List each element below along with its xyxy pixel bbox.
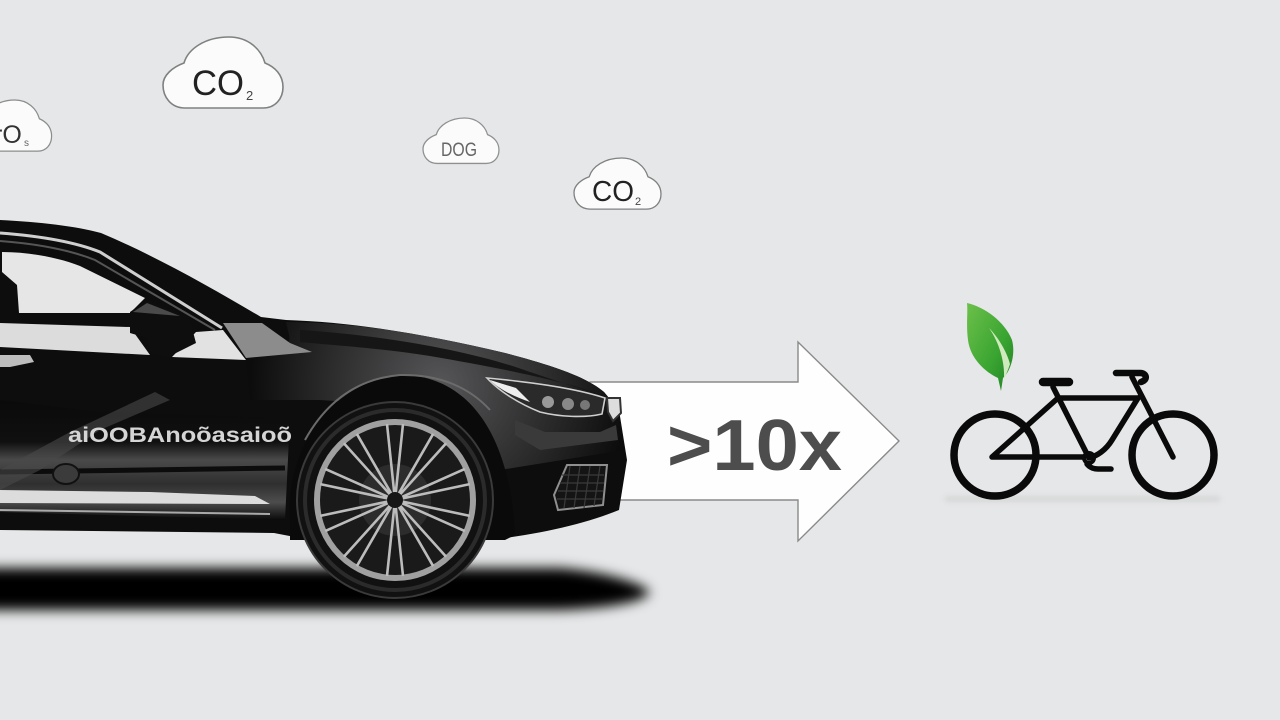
icon: bicycle [954, 373, 1214, 496]
hood dark crease [300, 330, 604, 396]
rear wheel [954, 414, 1036, 496]
rim [317, 422, 473, 578]
cloud: large CO2 [163, 37, 283, 108]
cloud: partially cropped CO2, left edge: s [24, 138, 29, 149]
cloud: large CO2: 2 [246, 88, 253, 103]
A-pillar chrome line [0, 233, 222, 328]
bumper crease [515, 420, 618, 450]
cloud: medium CO2: 2 [635, 196, 641, 208]
grille emblem [607, 398, 621, 421]
car ground shadow [0, 568, 650, 610]
lower window reflection [0, 323, 150, 355]
fog lamp grille [554, 465, 607, 510]
car: black sedan front [0, 220, 627, 598]
front wheel [1132, 414, 1214, 496]
icon: green leaf [967, 303, 1013, 391]
crank and pedal [1084, 453, 1094, 463]
handlebar [1116, 373, 1146, 382]
windshield base highlight [172, 330, 246, 360]
cloud: partially cropped CO2, left edge [0, 100, 52, 151]
cloud: small blurred label [423, 118, 499, 163]
side window [2, 252, 145, 313]
car body [0, 220, 627, 538]
door handle [0, 355, 34, 367]
spokes [320, 424, 470, 576]
cloud: large CO2: CO [192, 64, 244, 103]
front wheel [297, 402, 493, 598]
side graphic streaks [0, 392, 170, 490]
side mirror [130, 300, 196, 357]
cloud: small blurred label: DOG [441, 140, 477, 161]
sill chrome strip [0, 490, 270, 504]
arrow shape [590, 342, 899, 541]
brake disc [359, 464, 431, 536]
frame [992, 377, 1173, 458]
garbled side graphic: aiOOBAnoõasaioõ [68, 424, 292, 447]
bicycle ground shadow [945, 497, 1220, 501]
lower door reflection [0, 400, 290, 520]
arrow with multiplier [590, 342, 899, 541]
saddle [1043, 378, 1069, 386]
cloud: medium CO2 [574, 158, 661, 209]
fender and hood shading [246, 322, 624, 470]
hub [387, 492, 403, 508]
headlight housing [487, 378, 605, 416]
dark door crease [0, 468, 285, 472]
wheel arch [290, 375, 515, 540]
tyre [297, 402, 493, 598]
multiplier label: >10x [667, 406, 842, 486]
cloud: medium CO2: CO [592, 176, 634, 208]
